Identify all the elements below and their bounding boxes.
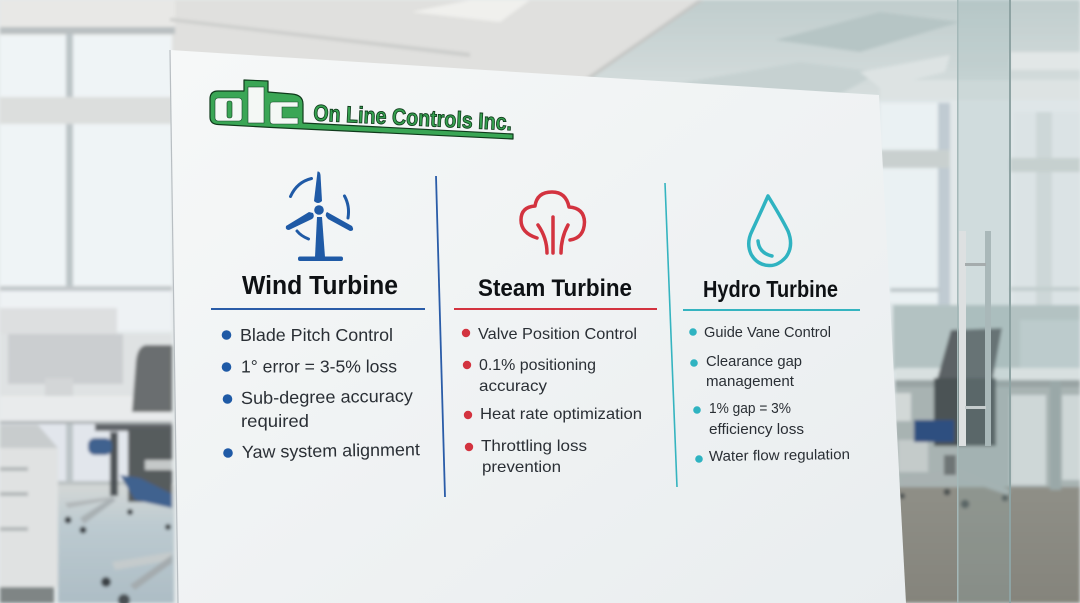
list: steam turbine: Throttling loss — [481, 438, 587, 455]
heading: Steam Turbine: Steam Turbine — [478, 275, 632, 302]
panel: hydro turbine — [683, 196, 860, 465]
icon: steam cloud — [521, 192, 584, 253]
right chair — [937, 328, 1002, 380]
left monitor — [0, 308, 117, 334]
list: wind turbine: 1° error = 3-5% loss — [241, 356, 397, 376]
divider: steam / hydro — [665, 183, 677, 487]
list: hydro turbine: efficiency loss — [709, 422, 804, 438]
right side windows — [878, 100, 1080, 490]
divider: wind / steam — [436, 176, 445, 497]
left chair — [132, 345, 172, 412]
door handles — [959, 231, 966, 446]
list: steam turbine: 0.1% positioning — [479, 357, 596, 374]
panel: wind turbine — [211, 171, 425, 462]
panel: steam turbine — [454, 192, 657, 476]
list: wind turbine: Blade Pitch Control — [240, 325, 393, 345]
icon: water drop — [749, 196, 791, 266]
left under-desk — [0, 424, 172, 488]
list: steam turbine: Valve Position Control — [478, 326, 637, 343]
list: hydro turbine: 1% gap = 3% — [709, 401, 791, 417]
heading: Wind Turbine: Wind Turbine — [242, 272, 398, 300]
list: hydro turbine: Clearance gap — [706, 354, 802, 370]
list: hydro turbine — [689, 325, 850, 465]
list: steam turbine — [462, 326, 642, 476]
left windows — [0, 35, 172, 310]
left drawer unit — [0, 448, 58, 588]
list: steam turbine: prevention — [482, 459, 561, 476]
list: wind turbine: Yaw system alignment — [242, 439, 420, 462]
ceiling — [0, 0, 720, 110]
right wall under desk — [895, 387, 1080, 490]
list: hydro turbine: Water flow regulation — [709, 447, 850, 465]
logo: On Line Controls Inc. — [210, 80, 513, 139]
whiteboard panel — [170, 50, 906, 603]
list: hydro turbine: Guide Vane Control — [704, 325, 831, 341]
list: wind turbine: Sub-degree accuracy — [241, 386, 413, 408]
logo wordmark: On Line Controls Inc. — [313, 100, 513, 135]
list: wind turbine: required — [241, 411, 309, 431]
list: steam turbine: Heat rate optimization — [480, 406, 642, 423]
list: wind turbine — [222, 325, 420, 462]
glass door panel — [958, 0, 1011, 603]
icon: wind turbine — [286, 171, 353, 261]
list: steam turbine: accuracy — [479, 378, 547, 395]
heading: Hydro Turbine: Hydro Turbine — [703, 276, 838, 302]
right floor — [895, 487, 1080, 603]
list: hydro turbine: management — [706, 374, 794, 390]
right drawers — [1010, 395, 1046, 485]
